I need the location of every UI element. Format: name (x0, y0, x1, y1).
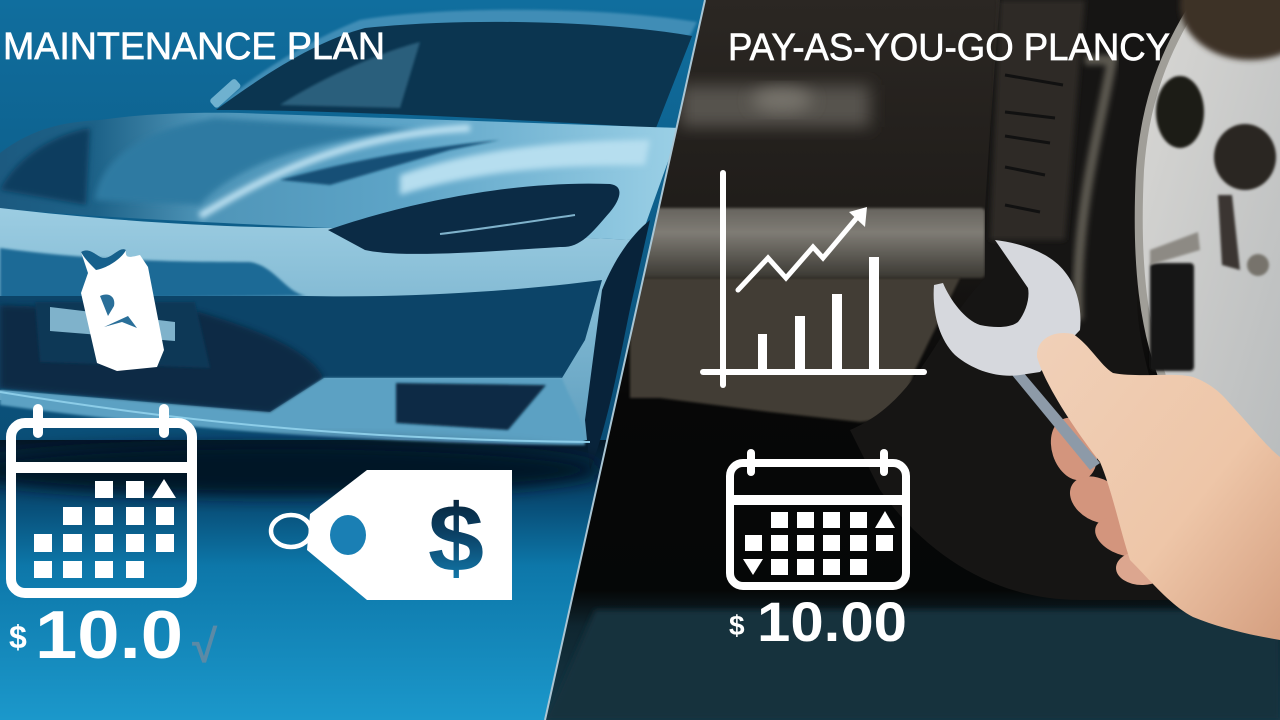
icon: wrench (934, 240, 1100, 470)
price: maintenance plan: $ (9, 619, 27, 655)
icon: price tag: $ (428, 485, 484, 592)
fascia (0, 280, 602, 412)
windscreen (216, 22, 692, 128)
front bumper (0, 208, 640, 440)
heading: pay-as-you-go: PAY-AS-YOU-GO PLANCY (728, 27, 1170, 69)
price: maintenance plan: 10.0 (35, 597, 183, 673)
lower lip (0, 378, 585, 445)
icon: small tag on car (81, 249, 164, 371)
icon: pay-as-you-go calendar (730, 449, 906, 586)
price: pay-as-you-go: $ (729, 610, 745, 641)
price: maintenance plan (9, 597, 218, 673)
price: maintenance plan: √ (192, 620, 218, 672)
floor (545, 610, 1280, 720)
icon: hand fingers (1043, 412, 1168, 585)
panel: maintenance plan car photo background (0, 0, 710, 720)
price: pay-as-you-go: 10.00 (757, 590, 907, 653)
icon: hand holding wrench (1037, 333, 1280, 640)
wheel side (585, 220, 650, 470)
tyre (850, 0, 1200, 600)
heading: maintenance plan: MAINTENANCE PLAN (3, 26, 385, 68)
chart: rising bars with trend arrow (700, 170, 927, 388)
wheel rim (1142, 22, 1280, 457)
panel: pay-as-you-go photo background (540, 0, 1280, 720)
hood (0, 113, 680, 240)
fog lamp (396, 383, 546, 430)
icon: price tag (271, 470, 512, 600)
headlight (328, 184, 619, 254)
licence plate (50, 307, 175, 341)
icon: maintenance calendar (11, 404, 192, 593)
floor (0, 440, 606, 720)
lower grille (0, 305, 324, 413)
roof (216, 10, 697, 108)
panel divider (545, 0, 705, 720)
mirror (210, 79, 240, 108)
